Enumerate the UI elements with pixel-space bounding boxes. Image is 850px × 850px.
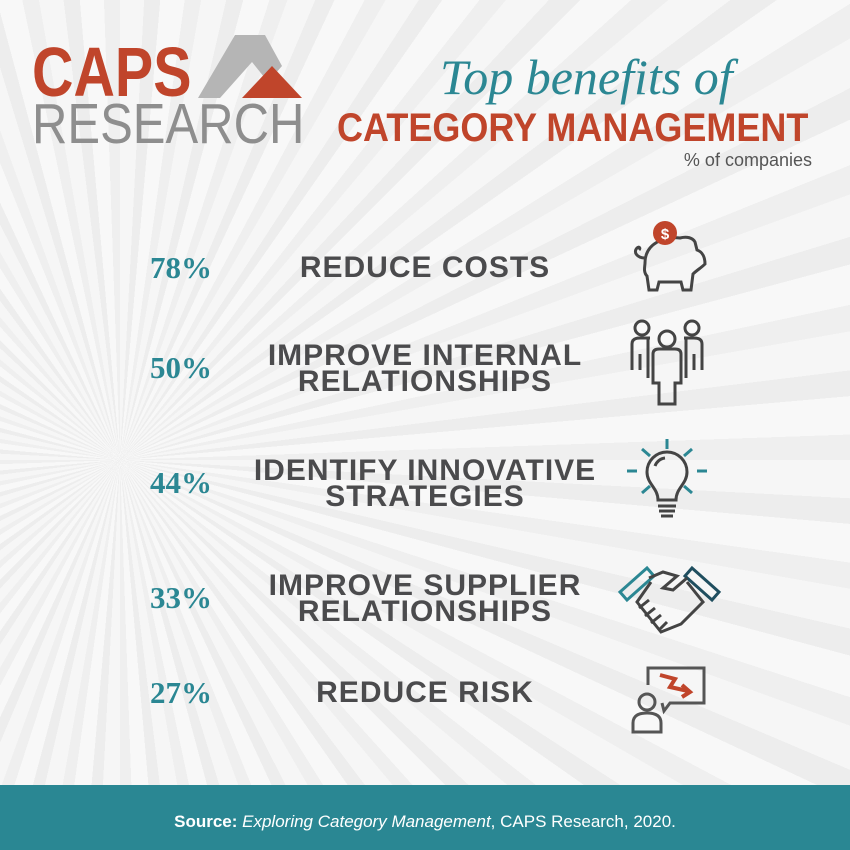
icon: piggy bank: $ (661, 226, 670, 243)
row 1 (150, 250, 550, 285)
percent 27: 27% (150, 675, 212, 710)
label internal: RELATIONSHIPS (298, 365, 552, 398)
title script: Top benefits of (440, 49, 733, 105)
label internal: IMPROVE INTERNAL (268, 339, 582, 372)
label innovative (254, 454, 596, 513)
row 5 (150, 675, 534, 710)
icon: people (630, 320, 704, 406)
label risk: REDUCE RISK (316, 676, 534, 709)
icon: handshake (618, 566, 721, 634)
logo mountain (198, 35, 302, 98)
label supplier (269, 569, 581, 628)
logo (32, 33, 304, 156)
icon: lightbulb (627, 439, 707, 518)
label supplier: IMPROVE SUPPLIER (269, 569, 581, 602)
percent 44: 44% (150, 465, 212, 500)
icon: piggy bank (634, 221, 706, 292)
percent 50: 50% (150, 350, 212, 385)
row 3 (150, 454, 596, 513)
row 2 (150, 339, 582, 398)
label innovative: IDENTIFY INNOVATIVE (254, 454, 596, 487)
label innovative: STRATEGIES (325, 480, 525, 513)
label reduce costs: REDUCE COSTS (300, 251, 550, 284)
percent 78: 78% (150, 250, 212, 285)
logo text RESEARCH: RESEARCH (32, 92, 304, 156)
label supplier: RELATIONSHIPS (298, 595, 552, 628)
row 4 (150, 569, 581, 628)
logo text CAPS: CAPS (32, 33, 191, 111)
subtitle: % of companies (684, 150, 812, 170)
source text: Source: Exploring Category Management, CAPS Research, 2020. (174, 812, 676, 831)
percent 33: 33% (150, 580, 212, 615)
icon: presenter (632, 666, 706, 734)
title main: CATEGORY MANAGEMENT (337, 106, 808, 150)
footer (0, 785, 850, 850)
label internal (268, 339, 582, 398)
